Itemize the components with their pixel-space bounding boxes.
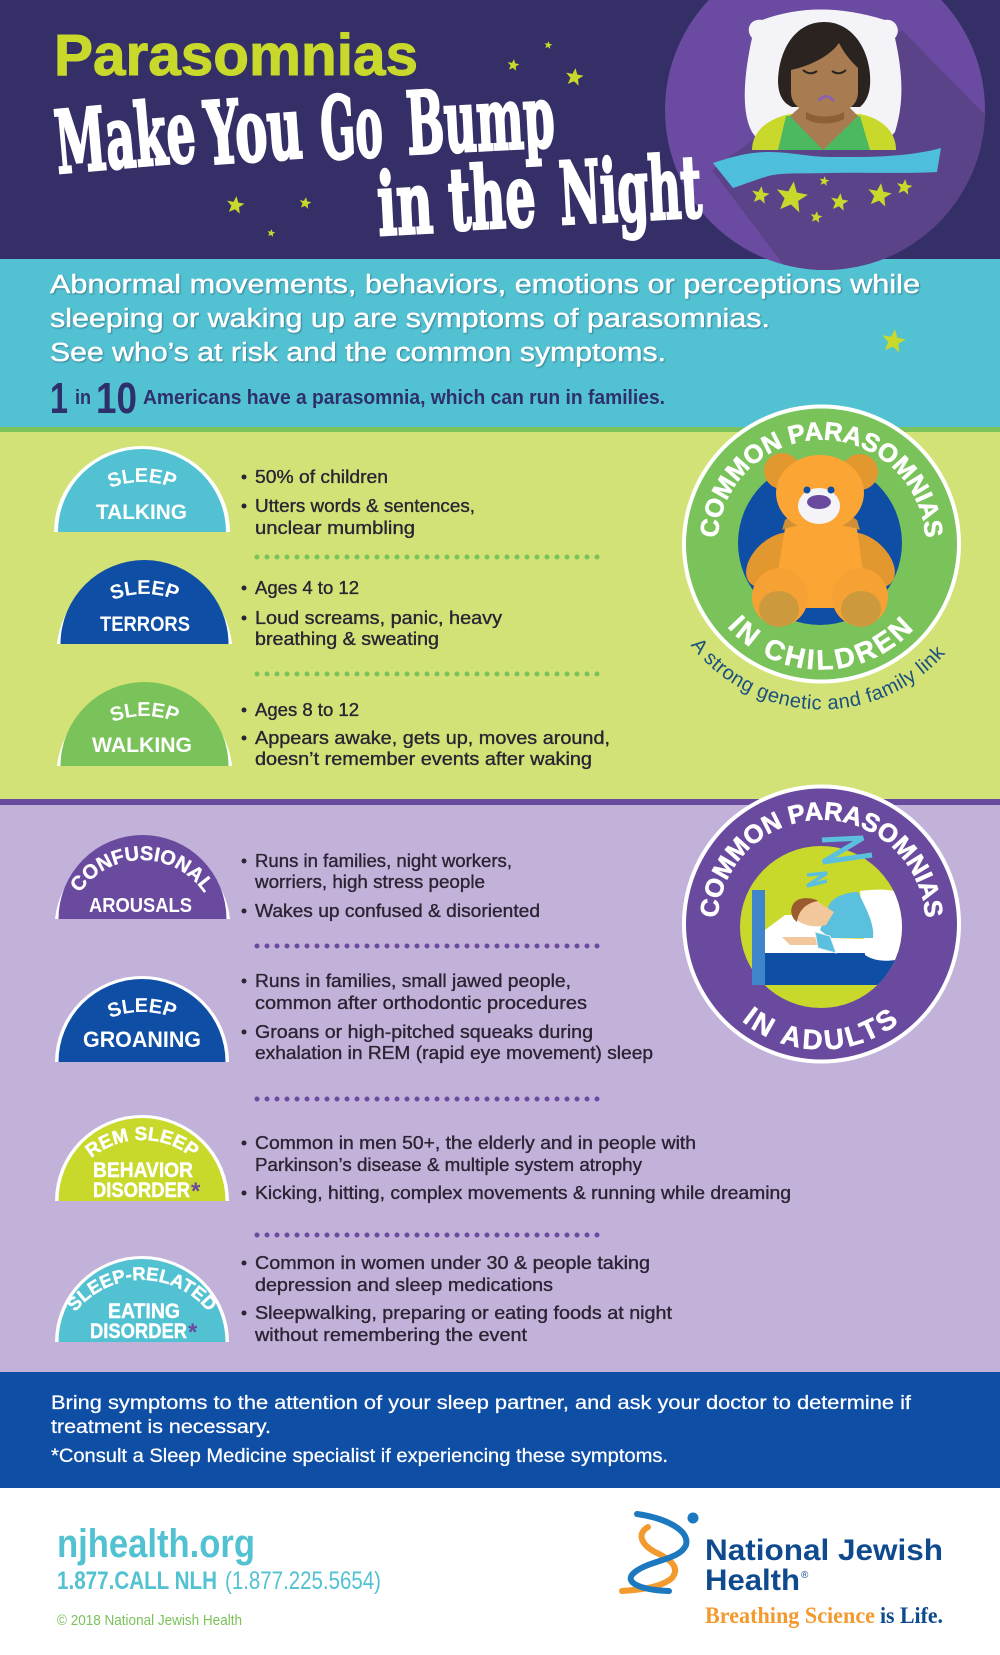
label: REM sleep behavior disorder xyxy=(55,1115,229,1205)
title: Make xyxy=(51,81,199,194)
text: sleep terrors facts: Ages 4 to 12 xyxy=(255,578,359,598)
label: sleep talking xyxy=(54,446,230,532)
title: Bump xyxy=(404,66,557,175)
text: sleep terrors facts: Loud screams, panic, heavy xyxy=(255,608,502,628)
title: Night xyxy=(557,137,704,245)
label: sleep-related eating disorder: * xyxy=(188,1319,198,1346)
illustration: sleeping woman in purple circle xyxy=(665,0,985,270)
text: sleep walking facts: Appears awake, gets up, moves around, xyxy=(255,728,610,748)
logo: National Jewish Health: Health xyxy=(705,1564,800,1597)
label: sleep-related eating disorder: SLEEP-RELATED xyxy=(68,1267,216,1310)
text: sleep walking facts: doesn’t remember events after waking xyxy=(255,749,592,769)
statistic: 1 in 10: in xyxy=(75,387,91,409)
text: confusional arousals facts: Wakes up confused & disoriented xyxy=(255,901,540,921)
statistic: 1 in 10: 10 xyxy=(96,374,137,423)
contact details: (1.877.225.5654) xyxy=(225,1567,381,1595)
text: sleep groaning facts: Groans or high-pitched squeaks during xyxy=(255,1022,593,1042)
badge: common parasomnias in adults xyxy=(682,784,961,1064)
contact details: njhealth.org xyxy=(57,1522,255,1566)
title: You xyxy=(201,77,305,185)
badge: common parasomnias in children: IN CHILDREN xyxy=(728,614,913,670)
intro text xyxy=(50,271,920,367)
logo: National Jewish Health: Breathing Science xyxy=(705,1603,875,1628)
label: sleep walking xyxy=(57,682,232,766)
label: REM sleep behavior disorder: BEHAVIOR xyxy=(93,1159,193,1182)
label: sleep walking: SLEEP xyxy=(110,702,179,721)
label: REM sleep behavior disorder: * xyxy=(191,1178,201,1205)
text: sleep talking facts: Utters words & sentences, xyxy=(255,496,475,516)
label: confusional arousals: AROUSALS xyxy=(89,895,192,917)
text: sleep-related eating disorder facts: Sleepwalking, preparing or eating foods at night xyxy=(255,1303,672,1323)
label: sleep terrors: SLEEP xyxy=(110,580,179,599)
text: confusional arousals facts: Runs in families, night workers, xyxy=(255,851,512,871)
text: sleep walking facts xyxy=(242,700,610,769)
label: sleep-related eating disorder: EATING xyxy=(108,1300,180,1323)
text: confusional arousals facts: worriers, high stress people xyxy=(254,872,485,892)
icon: DNA helix xyxy=(622,1512,698,1591)
title: in xyxy=(375,152,435,256)
text: sleep terrors facts xyxy=(242,578,502,649)
call to action text: Bring symptoms to the attention of your sleep partner, and ask your doctor to determine if xyxy=(51,1393,912,1414)
text: sleep terrors facts: breathing & sweating xyxy=(255,629,439,649)
badge: common parasomnias in children xyxy=(682,404,961,684)
logo: National Jewish Health: National Jewish xyxy=(705,1534,943,1567)
statistic: 1 in 10: Americans have a parasomnia, which can run in families. xyxy=(143,387,665,409)
text: sleep talking facts: unclear mumbling xyxy=(255,518,415,538)
title: the xyxy=(446,146,538,251)
icon: star xyxy=(882,329,906,353)
statistic: 1 in 10 xyxy=(50,374,665,423)
call to action text: *Consult a Sleep Medicine specialist if experiencing these symptoms. xyxy=(51,1446,668,1467)
decorative header stars xyxy=(227,41,584,237)
label: REM sleep behavior disorder: REM SLEEP xyxy=(84,1126,198,1158)
badge: common parasomnias in adults: COMMON PARASOMNIAS xyxy=(700,802,943,917)
badge: common parasomnias in adults: IN ADULTS xyxy=(742,1006,896,1050)
text: sleep-related eating disorder facts: without remembering the event xyxy=(254,1325,527,1345)
text: sleep-related eating disorder facts: depression and sleep medications xyxy=(255,1275,553,1295)
label: sleep groaning: SLEEP xyxy=(108,998,176,1017)
label: sleep-related eating disorder: DISORDER xyxy=(90,1320,187,1343)
text: sleep talking facts xyxy=(242,467,475,538)
intro text: See who’s at risk and the common symptoms. xyxy=(50,339,666,367)
call to action text: treatment is necessary. xyxy=(51,1417,271,1438)
label: sleep groaning: GROANING xyxy=(83,1027,201,1052)
intro text: Abnormal movements, behaviors, emotions or perceptions while xyxy=(50,271,920,299)
icon: sleeping man in bed xyxy=(765,890,905,985)
text: sleep groaning facts xyxy=(242,971,653,1063)
label: sleep talking: SLEEP xyxy=(108,468,176,487)
label: sleep walking: WALKING xyxy=(92,734,192,757)
text: confusional arousals facts xyxy=(242,851,540,921)
text: REM sleep behavior disorder facts: Common in men 50+, the elderly and in people with xyxy=(255,1133,696,1153)
intro text: sleeping or waking up are symptoms of parasomnias. xyxy=(50,305,770,333)
caption: genetic link: A strong genetic and family link xyxy=(690,640,946,710)
logo: National Jewish Health xyxy=(622,1512,943,1628)
text: sleep groaning facts: common after orthodontic procedures xyxy=(255,993,587,1013)
label: REM sleep behavior disorder: DISORDER xyxy=(93,1179,190,1202)
contact details: 1.877.CALL NLH xyxy=(57,1567,217,1595)
call to action text xyxy=(51,1393,912,1467)
logo: National Jewish Health: ® xyxy=(801,1570,809,1581)
text: REM sleep behavior disorder facts: Kicking, hitting, complex movements & running while dreaming xyxy=(255,1183,791,1203)
title: Parasomnias xyxy=(54,23,418,88)
label: sleep-related eating disorder xyxy=(55,1256,229,1346)
label: confusional arousals xyxy=(55,835,230,919)
text: REM sleep behavior disorder facts xyxy=(242,1133,791,1203)
contact details: © 2018 National Jewish Health xyxy=(57,1612,242,1629)
text: sleep groaning facts: exhalation in REM (rapid eye movement) sleep xyxy=(255,1043,653,1063)
contact details xyxy=(57,1522,381,1629)
logo: National Jewish Health: is Life. xyxy=(880,1603,943,1628)
label: sleep groaning xyxy=(55,976,229,1062)
label: sleep terrors xyxy=(57,560,232,644)
icon: teddy bear xyxy=(736,453,905,627)
label: sleep terrors: TERRORS xyxy=(100,613,190,636)
text: sleep talking facts: 50% of children xyxy=(255,467,388,487)
badge: common parasomnias in children: COMMON PARASOMNIAS xyxy=(700,422,943,537)
text: sleep walking facts: Ages 8 to 12 xyxy=(255,700,359,720)
blanket xyxy=(713,148,941,188)
label: sleep talking: TALKING xyxy=(96,501,187,524)
text: REM sleep behavior disorder facts: Parkinson’s disease & multiple system atrophy xyxy=(255,1155,642,1175)
title: Go xyxy=(318,76,385,180)
label: confusional arousals: CONFUSIONAL xyxy=(71,846,210,893)
text: sleep groaning facts: Runs in families, small jawed people, xyxy=(255,971,571,991)
title xyxy=(51,23,704,256)
text: sleep-related eating disorder facts xyxy=(242,1253,672,1345)
statistic: 1 in 10: 1 xyxy=(50,374,68,423)
text: sleep-related eating disorder facts: Common in women under 30 & people taking xyxy=(255,1253,650,1273)
